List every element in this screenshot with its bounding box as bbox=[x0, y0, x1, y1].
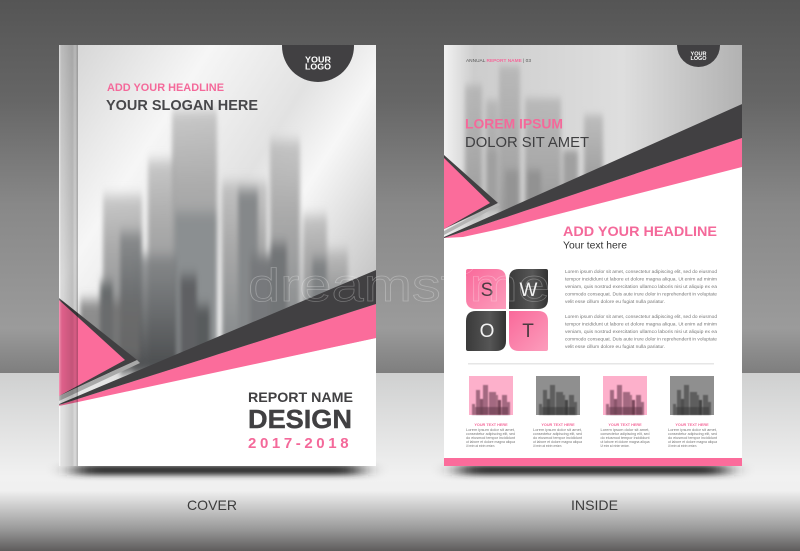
SWOT body text: tempor incididunt ut labore et dolore magna aliqua. Ut enim ad minim bbox=[565, 276, 717, 282]
inside logo badge: LOGO bbox=[690, 56, 707, 62]
SWOT body text bbox=[565, 269, 717, 349]
cover headline: ADD YOUR HEADLINE bbox=[107, 82, 224, 94]
spine bbox=[59, 45, 78, 466]
gray sliver bbox=[59, 360, 140, 401]
inside headline: ADD YOUR HEADLINE bbox=[563, 223, 717, 239]
thumbnail card 4: consectetur adipiscing elit, sed bbox=[668, 432, 717, 436]
SWOT body text: veniam, quis nostrud exercitation ullamco laboris nisi ut aliquip ex ea bbox=[565, 329, 717, 334]
SWOT body text: Lorem ipsum dolor sit amet, consectetur adipiscing elit, sed do eiusmod bbox=[565, 314, 717, 319]
label: inside: INSIDE bbox=[571, 497, 618, 513]
thumbnail card 1: do eiusmod tempor incididunt bbox=[466, 436, 515, 440]
inside subhead: Your text here bbox=[563, 240, 627, 252]
thumbnail card 1: Ut enim ad minim veniam. bbox=[466, 444, 495, 448]
thumbnail card 4: Ut enim ad minim veniam. bbox=[668, 444, 697, 448]
inside logo badge: YOUR bbox=[690, 52, 707, 58]
white lower area bbox=[59, 338, 376, 466]
cover title block: 2017-2018 bbox=[248, 435, 352, 452]
SWOT body text: velit esse cillum dolore eu fugiat nulla pariatur. bbox=[565, 344, 665, 349]
thumbnail card 4: Lorem ipsum dolor sit amet, bbox=[668, 428, 717, 432]
inside logo badge bbox=[677, 45, 720, 67]
pink band bbox=[59, 304, 376, 406]
dark triangle outline bbox=[444, 155, 498, 229]
thumbnail card 4: ut labore et dolore magna aliqua bbox=[668, 440, 717, 444]
O tile: O bbox=[480, 321, 494, 342]
blurred skyline bbox=[465, 66, 603, 220]
thumbnail card 2: ut labore et dolore magna aliqua bbox=[533, 440, 582, 444]
cover title block: DESIGN bbox=[248, 404, 352, 434]
thumbnail card 3: Ut enim ad minim veniam. bbox=[600, 444, 630, 448]
SWOT body text: veniam, quis nostrud exercitation ullamco laboris nisi ut aliquip ex ea bbox=[565, 284, 717, 289]
SWOT body text: commodo consequat. Duis aute irure dolor in reprehenderit in voluptate bbox=[565, 336, 717, 342]
thumbnail card 4: do eiusmod tempor incididunt bbox=[668, 436, 717, 440]
pink triangle bbox=[59, 300, 125, 396]
dark triangle outline bbox=[59, 298, 137, 396]
thumbnail card 2: do eiusmod tempor incididunt bbox=[533, 436, 582, 440]
inside page shadow bbox=[460, 465, 726, 475]
thumbnail card 1 bbox=[466, 376, 515, 448]
running header: ANNUAL REPORT NAME | 03 bbox=[466, 58, 532, 63]
thumbnail card 4 bbox=[668, 376, 717, 448]
thumbnail card 1: Lorem ipsum dolor sit amet, bbox=[466, 428, 515, 432]
thumbnail card 3: YOUR TEXT HERE bbox=[608, 423, 642, 427]
cover title block bbox=[248, 389, 353, 452]
T tile: T bbox=[522, 321, 534, 342]
watermark bbox=[248, 250, 550, 311]
thumbnail card 2: consectetur adipiscing elit, sed bbox=[533, 432, 582, 436]
inside footer bar bbox=[444, 458, 742, 466]
label: cover: COVER bbox=[187, 497, 237, 513]
S tile: S bbox=[481, 280, 493, 301]
cover logo badge bbox=[282, 45, 354, 82]
SWOT body text: velit esse cillum dolore eu fugiat nulla pariatur. bbox=[565, 299, 665, 304]
thumbnail card 3: Lorem ipsum dolor sit amet, bbox=[600, 428, 650, 432]
watermark: dreamstime bbox=[248, 259, 550, 311]
pink band bbox=[444, 138, 742, 238]
cover slogan: YOUR SLOGAN HERE bbox=[106, 97, 258, 114]
thumbnail card 2: Ut enim ad minim veniam. bbox=[533, 444, 562, 448]
thumbnail card 1: ut labore et dolore magna aliqua bbox=[466, 440, 515, 444]
cover logo badge: YOUR bbox=[305, 54, 331, 64]
thumbnail card 2: Lorem ipsum dolor sit amet, bbox=[533, 428, 582, 432]
panel: cover bbox=[59, 45, 376, 466]
cover title block: REPORT NAME bbox=[248, 389, 353, 405]
thumbnail card 1: YOUR TEXT HERE bbox=[474, 423, 508, 427]
SWOT body text: tempor incididunt ut labore et dolore magna aliqua. Ut enim ad minim bbox=[565, 322, 717, 326]
inside title dark: DOLOR SIT AMET bbox=[465, 134, 589, 151]
thumbnail card 1: consectetur adipiscing elit, sed bbox=[466, 432, 515, 436]
dark band bbox=[444, 104, 742, 238]
SWOT body text: Lorem ipsum dolor sit amet, consectetur adipiscing elit, sed do eiusmod bbox=[565, 269, 717, 274]
SWOT diagram bbox=[466, 269, 548, 351]
thumbnail card 3: do eiusmod tempor incididunt bbox=[600, 436, 650, 440]
blurred city skyline bbox=[80, 110, 348, 375]
panel: inside page bbox=[444, 45, 742, 466]
thumbnail card 3: ut labore et dolore magna aliqua bbox=[600, 440, 650, 444]
thumbnail card 3: consectetur adipiscing elit, sed bbox=[600, 432, 650, 436]
pink triangle bbox=[444, 158, 490, 229]
inside title pink: LOREM IPSUM bbox=[465, 116, 563, 132]
header photo background bbox=[444, 45, 742, 237]
W tile: W bbox=[520, 280, 538, 301]
thumbnail card 2 bbox=[533, 376, 582, 448]
dark band bbox=[59, 270, 376, 405]
SWOT body text: commodo consequat. Duis aute irure dolor in reprehenderit in voluptate bbox=[565, 292, 717, 296]
thumbnail card 4: YOUR TEXT HERE bbox=[675, 423, 709, 427]
cover logo badge: LOGO bbox=[305, 62, 331, 72]
thumbnail card 3 bbox=[600, 376, 650, 448]
gray sliver bbox=[444, 203, 500, 235]
thumbnail card 2: YOUR TEXT HERE bbox=[541, 423, 575, 427]
cover shadow bbox=[75, 465, 360, 475]
